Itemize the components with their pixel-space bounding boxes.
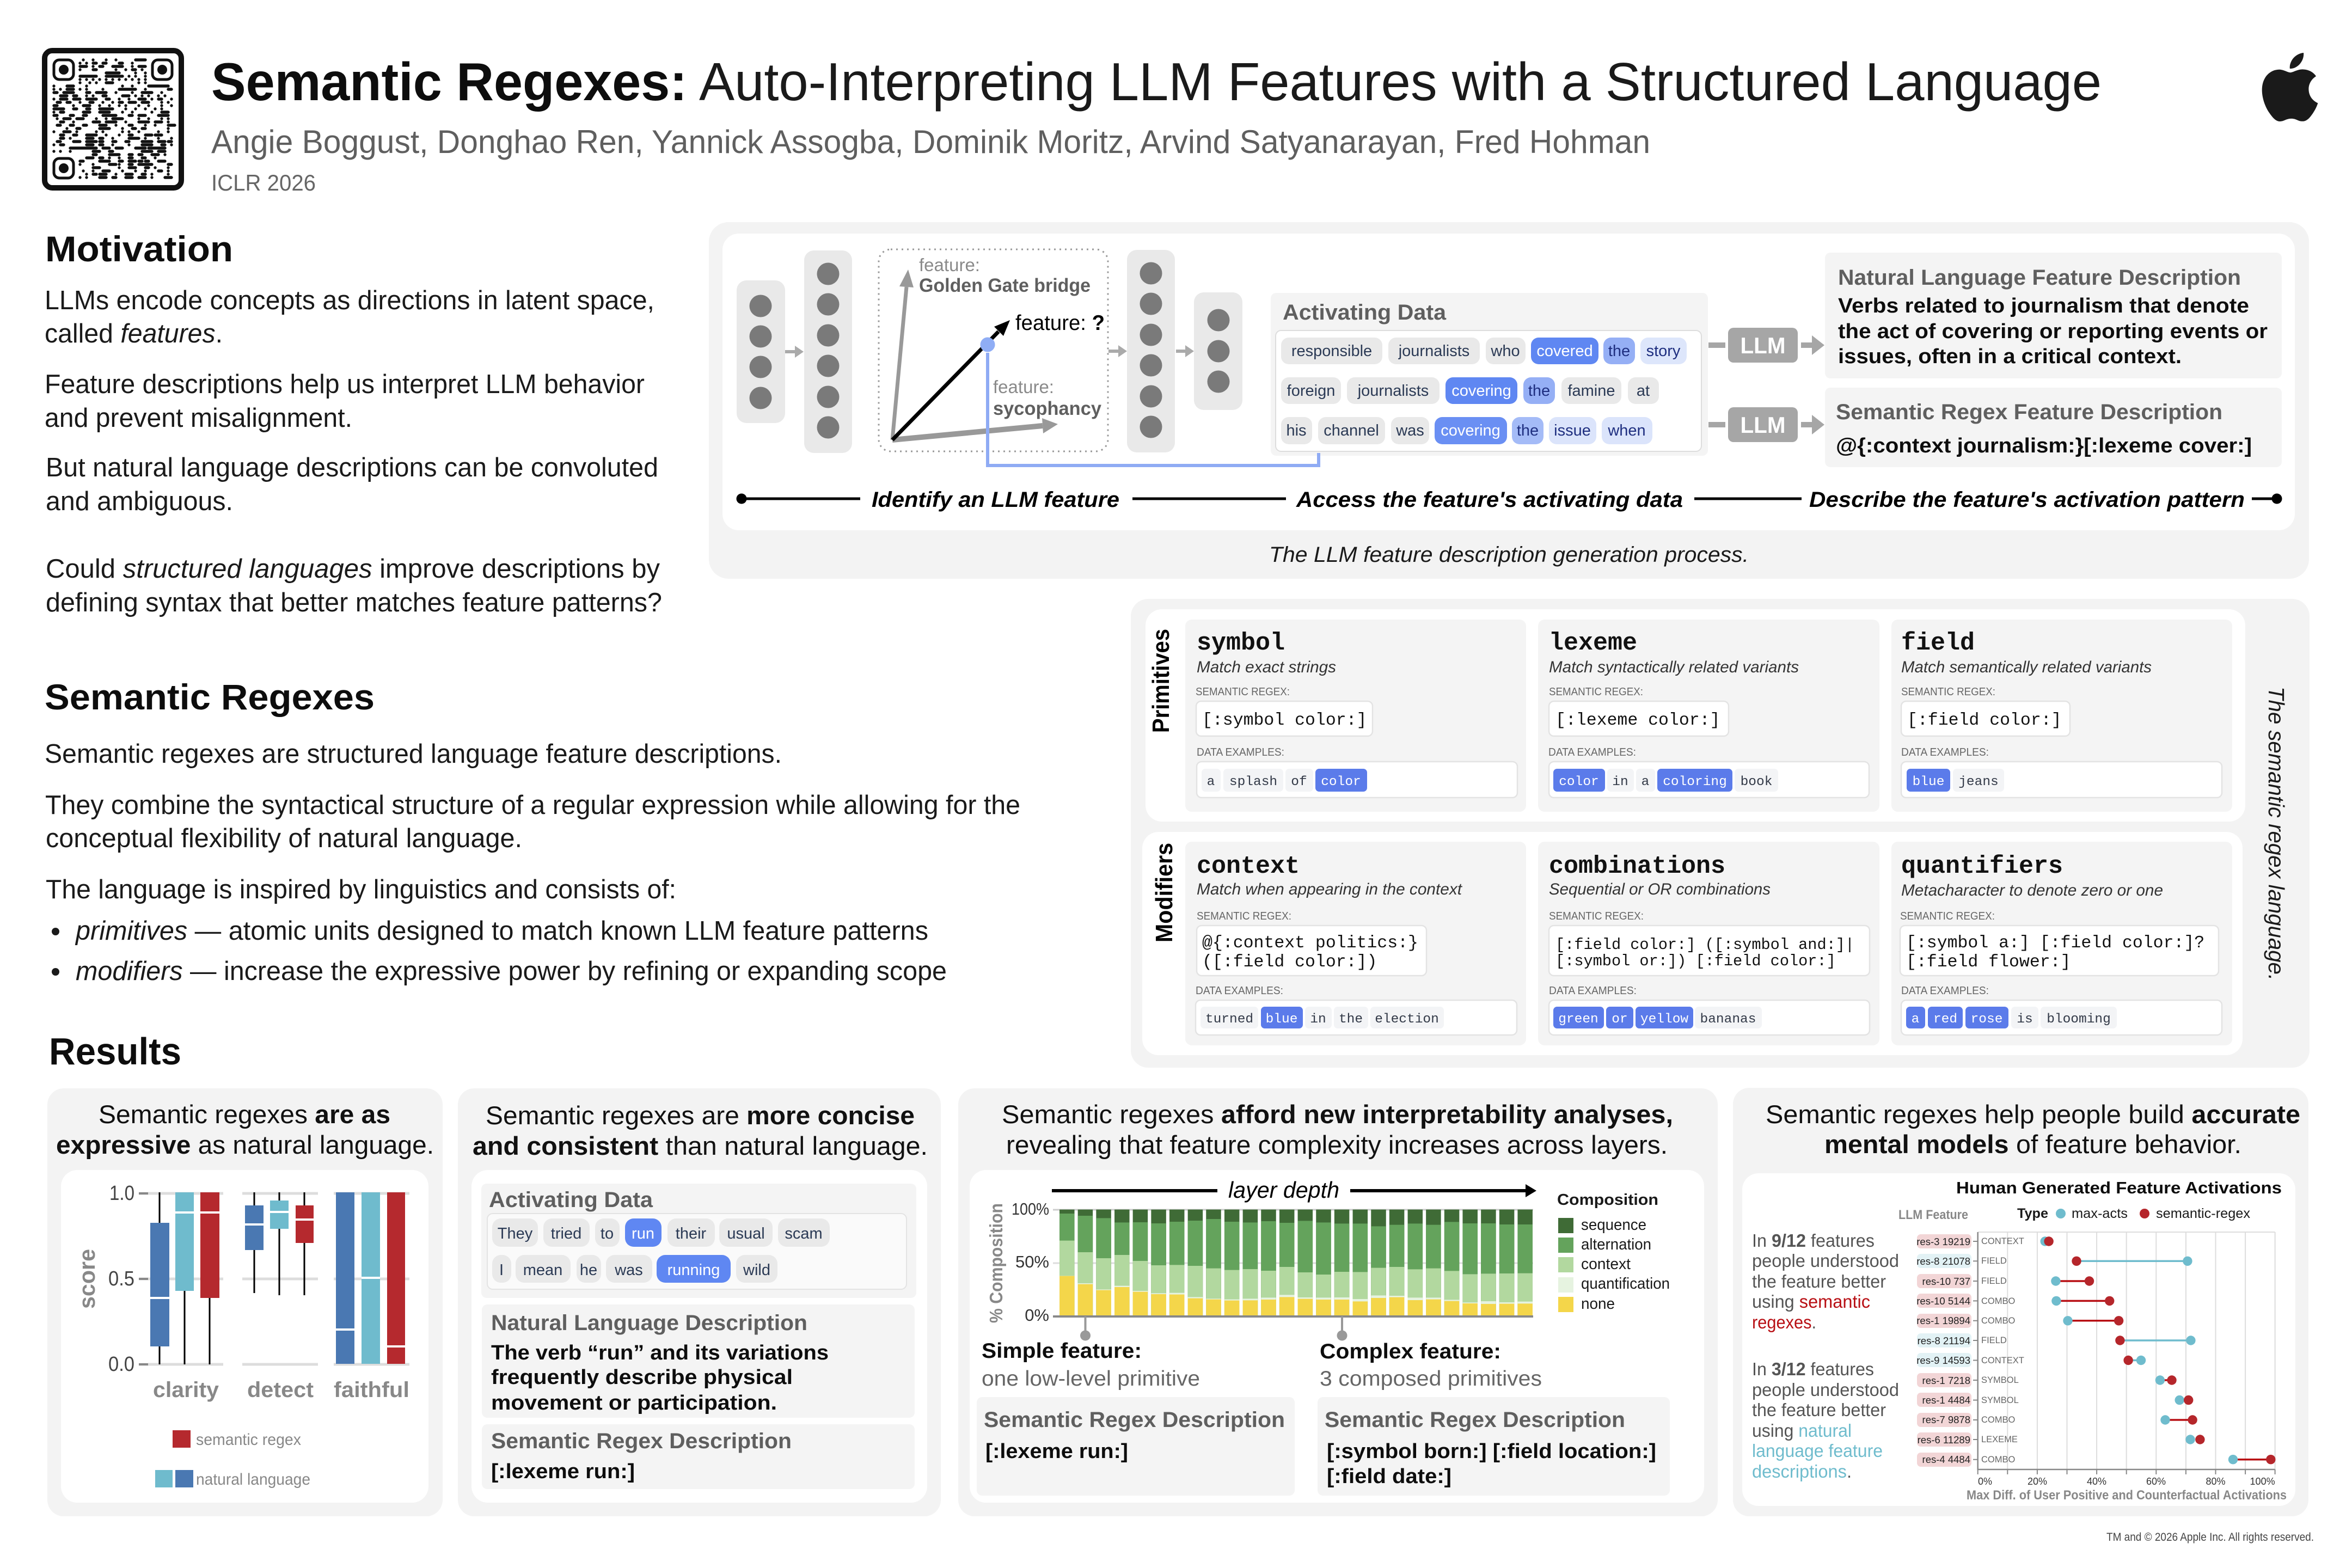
text block: motivation paragraphs: called features. [45,319,223,348]
heading: result 2: Semantic regexes are more concise [486,1101,915,1130]
panel: result 3 interpretability analyses [958,1088,1718,1516]
card: context: in [1310,1012,1326,1027]
card: lexeme: SEMANTIC REGEX: [1549,686,1643,698]
row labels: res-10 737 [1922,1276,1970,1287]
stacked bar chart [986,1199,1533,1340]
card: lexeme: a [1641,775,1649,789]
card: context: the [1339,1012,1363,1027]
x axis labels [1967,1476,2287,1503]
card: combinations: yellow [1640,1012,1688,1027]
card: context: @{:context politics:} [1202,934,1418,953]
row labels: CONTEXT [1981,1236,2024,1246]
token row 3: issue [1554,422,1591,439]
row labels: res-1 4484 [1922,1394,1970,1406]
legend: composition: context [1581,1255,1631,1273]
text block: motivation paragraphs: LLMs encode concepts as directions in latent space, [45,286,654,315]
LLM box semantic regex: LLM [1740,412,1786,438]
row labels: SYMBOL [1981,1375,2019,1385]
card: lexeme: book [1741,775,1772,789]
panel: LLM feature description generation process [709,222,2309,579]
activating data example [481,1184,916,1298]
text block: semantic regexes paragraphs: conceptual flexibility of natural language. [46,824,522,853]
box plot: 0.0 [108,1353,134,1376]
legend: composition: none [1581,1295,1615,1313]
text block: 3 of 12 features [1752,1359,1899,1481]
neural network layers right [1108,250,1242,452]
card: context: ([:field color:]) [1202,953,1377,972]
box plot: score [74,1249,100,1309]
row labels: COMBO [1981,1415,2016,1425]
activating data example: was [614,1261,643,1279]
token row 1: story [1646,342,1681,360]
text block: semantic regexes paragraphs: The language is inspired by linguistics and consists of: [46,875,676,904]
card: symbol: a [1207,775,1215,789]
legend: composition: Composition [1557,1191,1658,1209]
card: symbol: [:symbol color:] [1202,711,1367,730]
text block: motivation paragraphs [45,286,662,617]
card: combinations: [:symbol or:]) [:field color:] [1555,952,1836,970]
card: quantifiers [1891,842,2232,1045]
complex feature regex description [1318,1397,1670,1496]
dumbbell chart: LLM Feature [1898,1208,1968,1222]
heading: result 3 [1002,1100,1673,1159]
card: lexeme: DATA EXAMPLES: [1548,746,1636,758]
card: lexeme: in [1612,775,1628,789]
natural language description: The verb “run” and its variations [491,1342,829,1364]
text block: 3 of 12 features: people understood [1752,1380,1899,1400]
card: context: Match when appearing in the context [1197,880,1463,898]
card: quantifiers: blooming [2047,1012,2111,1027]
heading: result 1: expressive as natural language. [56,1130,434,1159]
row labels: res-1 7218 [1922,1375,1970,1386]
text block: motivation paragraphs: and ambiguous. [46,487,233,516]
process timeline: Access the feature's activating data [1296,488,1683,512]
text block: semantic regexes paragraphs [45,739,1020,986]
row labels: FIELD [1981,1276,2007,1286]
token row 3: channel [1324,422,1379,439]
token row 2: famine [1567,382,1615,400]
heading: result 1: Semantic regexes are as [99,1100,390,1129]
box plot: clarity [153,1378,219,1402]
simple feature regex description [977,1397,1295,1496]
label: the semantic regex language: The semantic regex language. [2264,687,2289,981]
natural language feature description [1825,253,2282,378]
natural language feature description: issues, often in a critical context. [1838,345,2182,368]
card: combinations: Sequential or OR combinations [1549,880,1771,898]
token row 1: covered [1536,342,1593,360]
label: simple feature: one low-level primitive [982,1367,1200,1391]
x axis labels: Max Diff. of User Positive and Counterfactual Activations [1967,1488,2287,1503]
text block: 9 of 12 features: people understood [1752,1251,1899,1271]
label: complex feature: Complex feature: [1320,1340,1501,1363]
activating data example: wild [743,1261,770,1279]
card: lexeme [1538,620,1879,812]
simple feature regex description: Semantic Regex Description [984,1408,1285,1432]
dumbbell chart: Human Generated Feature Activations [1956,1178,2282,1197]
complex feature regex description: [:field date:] [1327,1465,1451,1488]
token row 3: when [1607,422,1646,439]
card: context [1185,842,1526,1045]
complex feature regex description: [:symbol born:] [:field location:] [1327,1440,1656,1463]
stacked bar chart: 0% [1025,1306,1049,1325]
card: combinations: or [1612,1012,1628,1027]
legend [155,1430,310,1489]
card: quantifiers: DATA EXAMPLES: [1901,985,1989,997]
text block: motivation paragraphs: Could structured languages improve descriptions by [46,554,660,584]
card: context: blue [1266,1012,1297,1027]
token row 2: at [1637,382,1650,400]
card: symbol: of [1291,775,1307,789]
card: combinations: SEMANTIC REGEX: [1549,910,1644,922]
row labels: res-8 21194 [1918,1335,1970,1346]
row labels: res-9 14593 [1916,1355,1970,1366]
x axis labels: 40% [2087,1476,2106,1487]
card: context: DATA EXAMPLES: [1196,985,1283,997]
card: quantifiers: [:symbol a:] [:field color:]? [1906,934,2204,953]
dumbbell chart [1898,1178,2287,1503]
text block: 3 of 12 features: In 3/12 features [1752,1359,1874,1379]
semantic regex feature description [1825,388,2282,467]
text block: semantic regexes paragraphs: primitives — atomic units designed to match known LLM feature patterns [75,916,928,946]
arrow: layer depth [1052,1177,1536,1203]
card: symbol: splash [1229,775,1277,789]
icon: QR code [45,51,181,188]
legend: semantic regex [196,1431,301,1449]
panel: result 1 expressiveness [47,1088,443,1516]
activating data panel [1271,293,1708,456]
label: simple feature: Simple feature: [982,1339,1142,1363]
panel: result 4 mental models [1733,1088,2308,1516]
natural language feature description: Verbs related to journalism that denote [1838,295,2249,317]
semantic regex description: Semantic Regex Description [491,1429,792,1453]
heading: results: Results [49,1030,181,1073]
x axis labels: 20% [2028,1476,2047,1487]
heading: result 1 [56,1100,434,1159]
text block: 3 of 12 features: language feature [1752,1441,1883,1461]
title: Auto-Interpreting LLM Features with a Structured Language [699,52,2102,112]
legend: type: Type [2017,1206,2048,1221]
text block: 9 of 12 features: In 9/12 features [1752,1230,1875,1251]
process timeline [736,488,2282,512]
caption: The LLM feature description generation process. [1269,543,1749,567]
card: combinations: DATA EXAMPLES: [1549,985,1637,997]
card: context: turned [1205,1012,1253,1027]
legend: type: semantic-regex [2156,1206,2250,1221]
box plot: 0.5 [108,1267,134,1290]
text block: motivation paragraphs: Feature descriptions help us interpret LLM behavior [45,370,645,399]
stacked bar chart: 100% [1012,1199,1049,1218]
legend: composition: alternation [1581,1236,1651,1253]
card: lexeme: Match syntactically related variants [1549,658,1799,676]
token row 2: foreign [1287,382,1335,400]
activating data example: running [667,1261,720,1279]
process timeline: Describe the feature's activation pattern [1809,488,2245,512]
panel: result 2 concision [458,1088,941,1516]
legend: composition [1557,1191,1670,1313]
card: quantifiers: rose [1971,1012,2002,1027]
card: combinations: bananas [1700,1012,1756,1027]
token row 2: journalists [1357,382,1429,400]
activating data example: usual [727,1225,765,1242]
activating data example: he [580,1261,597,1279]
card: field: DATA EXAMPLES: [1901,746,1989,758]
card: combinations: [:field color:] ([:symbol and:]| [1555,936,1854,954]
LLM box natural language [1708,328,1824,363]
row labels: FIELD [1981,1336,2007,1345]
box plot: detect [247,1378,314,1402]
text block: 9 of 12 features [1752,1230,1899,1332]
card: quantifiers: is [2017,1012,2033,1027]
token row 1: responsible [1291,342,1372,360]
semantic regex feature description: Semantic Regex Feature Description [1836,400,2222,424]
row labels: res-3 19219 [1916,1236,1970,1247]
authors: Angie Boggust, Donghao Ren, Yannick Assogba, Dominik Moritz, Arvind Satyanarayan, Fred Hohman [211,124,1650,160]
natural language feature description: the act of covering or reporting events or [1838,320,2268,343]
venue: ICLR 2026 [211,170,316,195]
card: combinations [1538,842,1879,1045]
legend: type [2017,1206,2250,1221]
footer: TM and © 2026 Apple Inc. All rights reserved. [2106,1531,2314,1543]
semantic regex feature description: @{:context journalism:}[:lexeme cover:] [1836,434,2252,457]
token row 2 [1281,377,1659,404]
heading: result 2: and consistent than natural language. [473,1131,928,1160]
heading: semantic regexes: Semantic Regexes [45,677,375,717]
card: field: blue [1913,775,1944,789]
semantic regex description [482,1424,915,1489]
label: complex feature: 3 composed primitives [1320,1367,1542,1391]
heading: result 3: revealing that feature complexity increases across layers. [1006,1130,1668,1159]
activating data panel: Activating Data [1283,301,1447,324]
text block: 9 of 12 features: the feature better [1752,1271,1886,1291]
card: combinations: combinations [1549,853,1725,880]
label: simple feature [982,1339,1200,1391]
activating data example: I [499,1261,504,1279]
token row 3 [1281,417,1652,444]
panel: semantic regexes intro [45,677,1020,986]
card: quantifiers: quantifiers [1901,853,2063,880]
card: symbol: DATA EXAMPLES: [1197,746,1284,758]
row labels: LEXEME [1981,1435,2018,1444]
token row 1: who [1490,342,1520,360]
label: complex feature [1320,1340,1542,1391]
token row 2: covering [1451,382,1511,400]
heading: motivation: Motivation [45,229,233,269]
card: quantifiers: [:field flower:] [1906,953,2071,972]
text block: 9 of 12 features: regexes. [1752,1312,1816,1332]
row labels: COMBO [1981,1296,2016,1306]
label: primitives: Primitives [1148,629,1174,733]
card: lexeme: color [1559,775,1599,789]
feature vector space diagram: Golden Gate bridge [919,275,1091,296]
legend: type: max-acts [2072,1206,2128,1221]
activating data example: to [601,1225,614,1242]
feature vector space diagram: feature: [993,377,1054,397]
card: field [1891,620,2232,812]
x axis labels: 0% [1978,1476,1992,1487]
text block: motivation paragraphs: defining syntax that better matches feature patterns? [46,588,662,617]
label: modifiers: Modifiers [1151,843,1178,942]
row labels: res-8 21078 [1916,1255,1970,1267]
text block: 3 of 12 features: using natural [1752,1420,1852,1441]
panel: motivation [45,229,662,617]
token row 3: covering [1441,422,1500,439]
token row 3: the [1517,422,1539,439]
token row 2: the [1528,382,1550,400]
card: combinations: green [1558,1012,1598,1027]
text block: motivation paragraphs: and prevent misalignment. [45,403,352,433]
card: symbol [1185,620,1526,812]
text block: semantic regexes paragraphs: modifiers — increase the expressive power by refining or expanding scope [76,957,947,986]
stacked bar chart: % Composition [986,1203,1006,1323]
pin: simple feature [1080,1316,1091,1340]
panel: semantic regex language [1131,599,2310,1068]
card: symbol: Match exact strings [1197,658,1336,676]
natural language description: frequently describe physical [491,1366,793,1389]
row labels: res-6 11289 [1918,1434,1970,1445]
card: field: SEMANTIC REGEX: [1901,686,1995,698]
row labels: res-10 5144 [1916,1295,1970,1307]
x axis labels: 80% [2206,1476,2226,1487]
LLM box semantic regex [1708,407,1824,442]
box plot: 1.0 [109,1182,134,1205]
row labels: res-1 19894 [1916,1315,1970,1326]
text block: semantic regexes paragraphs: Semantic regexes are structured language feature descriptions. [45,739,782,769]
heading: result 4 [1766,1100,2300,1159]
simple feature regex description: [:lexeme run:] [985,1440,1128,1463]
text block: 3 of 12 features: descriptions. [1752,1461,1852,1481]
LLM box natural language: LLM [1740,333,1786,358]
semantic-regex dots [2044,1236,2275,1464]
process timeline: Identify an LLM feature [872,488,1119,512]
card: quantifiers: Metacharacter to denote zero or one [1901,881,2163,899]
natural language description [482,1304,915,1418]
activating data example: their [676,1225,707,1242]
activating data example: scam [785,1225,823,1242]
feature vector space diagram: feature: ? [1015,311,1105,335]
card: symbol: symbol [1197,629,1285,657]
card: quantifiers: red [1933,1012,1957,1027]
card: field: jeans [1958,775,1999,789]
complex feature regex description: Semantic Regex Description [1325,1408,1625,1432]
heading: result 3: Semantic regexes afford new interpretability analyses, [1002,1100,1673,1129]
box plot: faithful [334,1378,409,1402]
box plot [74,1182,409,1402]
heading: result 4: mental models of feature behavior. [1824,1130,2241,1159]
card: field: Match semantically related variants [1901,658,2152,676]
dumbbell connectors [2056,1261,2271,1460]
token row 1 [1281,338,1687,364]
token row 1: journalists [1398,342,1469,360]
feature vector space diagram: sycophancy [993,398,1102,419]
text block: motivation paragraphs: But natural language descriptions can be convoluted [46,453,658,482]
activating data example: run [632,1225,654,1242]
arrow: layer depth: layer depth [1228,1177,1339,1203]
card: quantifiers: SEMANTIC REGEX: [1900,910,1995,922]
row labels: FIELD [1981,1256,2007,1266]
activating data example: mean [523,1261,562,1279]
card: field: [:field color:] [1907,711,2062,730]
card: context: context [1197,853,1300,880]
legend: natural language [196,1471,310,1489]
semantic regex description: [:lexeme run:] [491,1460,635,1483]
title: Semantic Regexes: [211,52,687,112]
token row 3: was [1395,422,1424,439]
row labels: CONTEXT [1981,1356,2024,1365]
row labels [1916,1234,2024,1467]
legend: composition: sequence [1581,1216,1646,1234]
natural language description: Natural Language Description [491,1311,807,1335]
x axis labels: 60% [2146,1476,2166,1487]
card: symbol: SEMANTIC REGEX: [1196,686,1290,698]
row labels: COMBO [1981,1455,2016,1465]
row labels: res-7 9878 [1922,1414,1970,1425]
card: context: SEMANTIC REGEX: [1197,910,1291,922]
heading: result 2 [473,1101,928,1160]
activating data example: Activating Data [489,1188,653,1212]
natural language feature description: Natural Language Feature Description [1838,266,2241,290]
pin: complex feature [1337,1316,1347,1340]
max-acts dots [2041,1236,2238,1464]
text block: 9 of 12 features: using semantic [1752,1291,1870,1312]
row labels: SYMBOL [1981,1395,2019,1405]
card: field: field [1901,629,1975,657]
card: lexeme: lexeme [1549,629,1637,657]
neural network layers left [737,250,852,453]
x axis labels: 100% [2250,1476,2275,1487]
card: symbol: color [1321,775,1361,789]
heading: result 4: Semantic regexes help people build accurate [1766,1100,2300,1129]
stacked bar chart: 50% [1015,1252,1049,1271]
activating data example: They [498,1225,533,1242]
card: lexeme: coloring [1663,775,1727,789]
card: context: election [1375,1012,1439,1027]
card: lexeme: [:lexeme color:] [1555,711,1720,730]
card: quantifiers: a [1912,1012,1919,1027]
legend: composition: quantification [1581,1275,1670,1293]
activating data example: tried [551,1225,581,1242]
text block: semantic regexes paragraphs: They combine the syntactical structure of a regular expression while allowing for the [45,791,1020,820]
natural language description: movement or participation. [491,1392,777,1414]
icon: apple logo [2262,53,2318,121]
feature vector space diagram [879,249,1319,465]
row labels: res-4 4484 [1922,1454,1970,1465]
row labels: COMBO [1981,1316,2016,1326]
token row 3: his [1286,422,1307,439]
token row 1: the [1608,342,1630,360]
feature vector space diagram: feature: [919,255,980,275]
text block: 3 of 12 features: the feature better [1752,1400,1886,1420]
